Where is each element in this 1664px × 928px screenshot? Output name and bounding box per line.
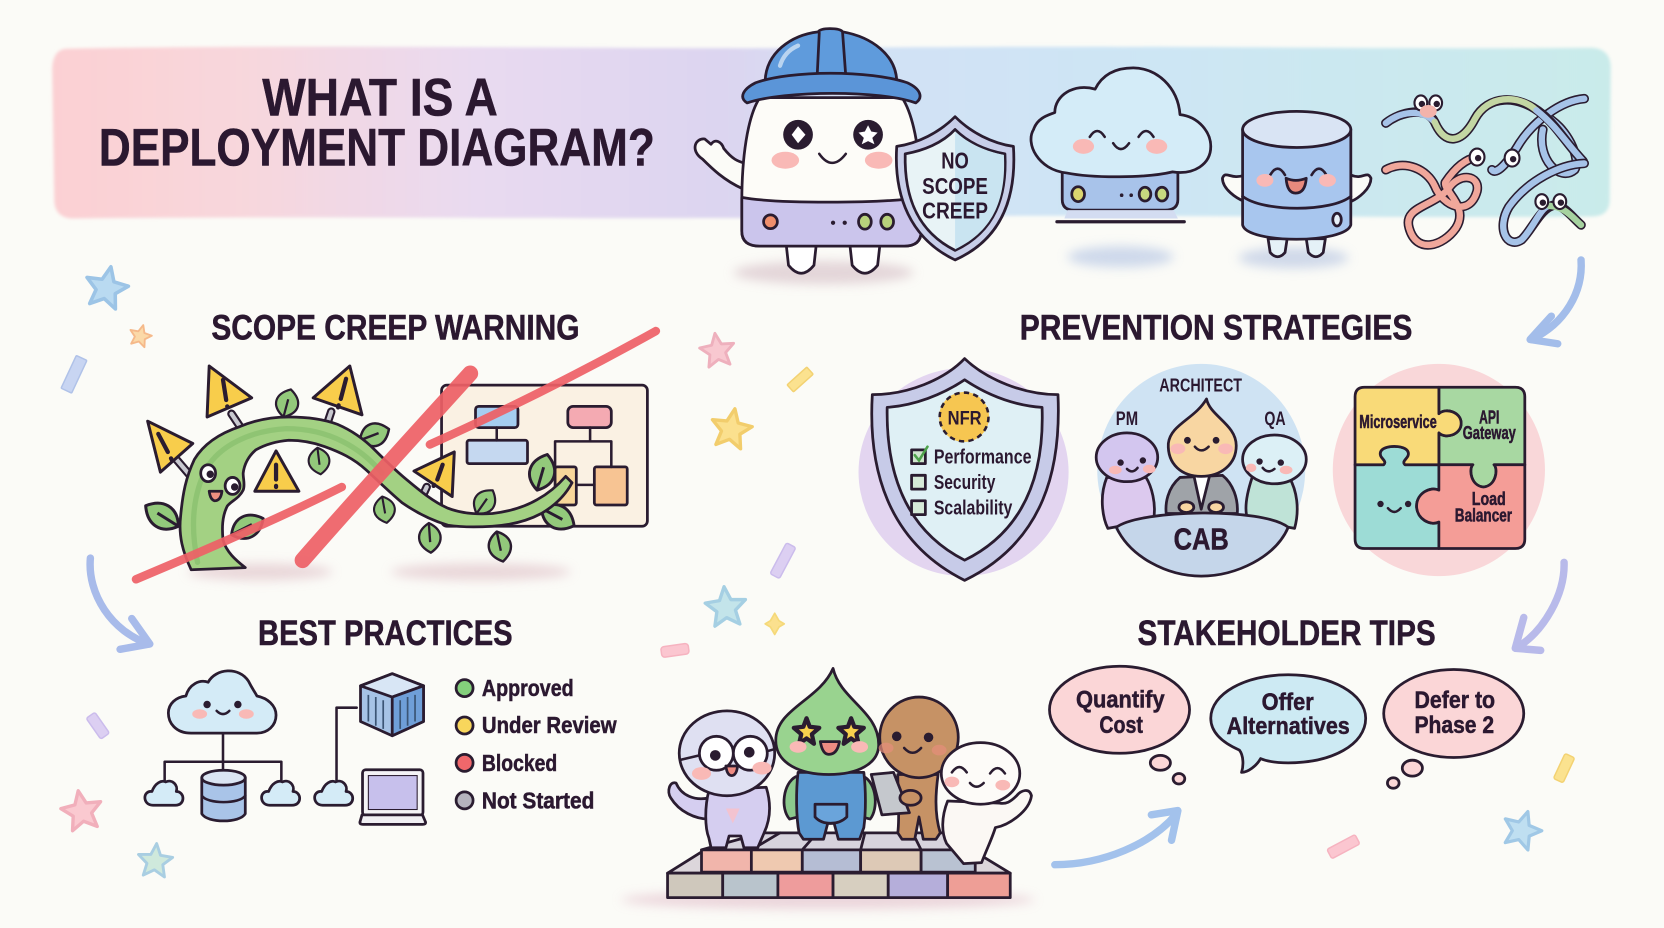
- system diagram card: [442, 385, 647, 526]
- mascot: server robot with hard hat: [695, 29, 921, 284]
- QA character: [1243, 435, 1306, 528]
- strategy: puzzle of services: Balancer: [1455, 505, 1512, 525]
- bubble: offer alternatives: Alternatives: [1227, 713, 1350, 740]
- vine stem: [180, 417, 572, 570]
- warning sign posts: [176, 412, 427, 499]
- legend: Not Started: [482, 787, 594, 813]
- title: WHAT IS A: [262, 69, 498, 128]
- strategy: change advisory board: ARCHITECT: [1159, 374, 1243, 395]
- arrow: banner to prevention: [1530, 260, 1581, 344]
- small cloud nodes: [145, 781, 353, 805]
- shield: no scope creep: SCOPE: [922, 173, 988, 199]
- legend: Approved: [482, 675, 574, 701]
- CAB table: [1116, 513, 1288, 576]
- shield: no scope creep: CREEP: [922, 198, 988, 224]
- strategy: puzzle of services: Load: [1472, 489, 1506, 509]
- strategy: puzzle of services: Microservice: [1359, 412, 1437, 432]
- bubble: quantify cost: [1049, 666, 1190, 784]
- bubble: quantify cost: Quantify: [1076, 687, 1165, 714]
- confetti stars: [58, 262, 1546, 878]
- character: glasses: [669, 711, 775, 848]
- heading: best practices: BEST PRACTICES: [258, 613, 513, 653]
- title: DEPLOYMENT DIAGRAM?: [99, 119, 655, 178]
- arrow: team to bubbles: [1055, 811, 1178, 865]
- legend: Blocked: [482, 750, 557, 776]
- PM character: [1096, 433, 1158, 528]
- shield: no scope creep: NO: [941, 148, 969, 174]
- badge: NFR: NFR: [948, 408, 982, 429]
- mascot: happy cloud server: [1031, 68, 1211, 267]
- character: brown with tablet: [871, 697, 958, 839]
- strategy: puzzle of services: [1333, 364, 1545, 576]
- bubble: defer to phase 2: Phase 2: [1414, 712, 1494, 739]
- red strikethrough strokes: [136, 331, 656, 579]
- heading: scope creep warning: SCOPE CREEP WARNING: [211, 308, 579, 348]
- confetti ribbons: [61, 355, 1575, 859]
- team on brick platform: [621, 668, 1035, 909]
- warning signs: [148, 366, 454, 497]
- mascot: database cylinder: [1222, 111, 1371, 268]
- architect character: [1166, 399, 1237, 514]
- heading: prevention strategies: PREVENTION STRATEGIES: [1020, 308, 1412, 348]
- bubble: defer to phase 2: [1384, 669, 1524, 788]
- legend: Under Review: [482, 712, 617, 738]
- vine face: [201, 465, 240, 501]
- arrow: prevention to stakeholder: [1515, 562, 1564, 650]
- strategy: change advisory board: PM: [1116, 409, 1138, 430]
- strategy: change advisory board: CAB: [1174, 522, 1229, 557]
- mascot: tangled wire snakes: [1386, 95, 1584, 245]
- strategy: puzzle of services: Gateway: [1463, 423, 1516, 443]
- big cloud node: [168, 671, 276, 733]
- illustration: scope creep vine over diagram: [136, 331, 656, 580]
- title: [99, 69, 655, 178]
- bubble: quantify cost: Cost: [1099, 712, 1143, 739]
- strategy: puzzle of services: API: [1479, 407, 1499, 427]
- brick platform: [668, 833, 1010, 898]
- checklist: Security: [934, 472, 996, 494]
- strategy: change advisory board: QA: [1264, 409, 1286, 430]
- laptop: [360, 770, 426, 824]
- banner: [52, 47, 1611, 219]
- legend: [456, 675, 617, 813]
- checklist: Scalability: [934, 498, 1013, 520]
- character: white waving: [941, 743, 1031, 864]
- strategy: change advisory board: [1096, 364, 1306, 576]
- diagram: best practice deployment nodes: [145, 671, 426, 824]
- character: green drop with overalls: [776, 668, 879, 839]
- heading: stakeholder tips: STAKEHOLDER TIPS: [1138, 613, 1436, 653]
- shield: no scope creep: [896, 117, 1014, 260]
- strategy: NFR shield checklist: [859, 359, 1069, 580]
- checklist: [912, 447, 1031, 520]
- bubble: defer to phase 2: Defer to: [1414, 687, 1495, 714]
- badge: NFR: [940, 393, 988, 441]
- container: [361, 674, 424, 736]
- bubble: offer alternatives: Offer: [1262, 689, 1314, 716]
- checklist: Performance: [934, 447, 1031, 469]
- vine leaves: [139, 387, 579, 564]
- database: [202, 770, 245, 821]
- arrow: scope to best practices: [90, 558, 150, 649]
- bubble: offer alternatives: [1211, 675, 1366, 772]
